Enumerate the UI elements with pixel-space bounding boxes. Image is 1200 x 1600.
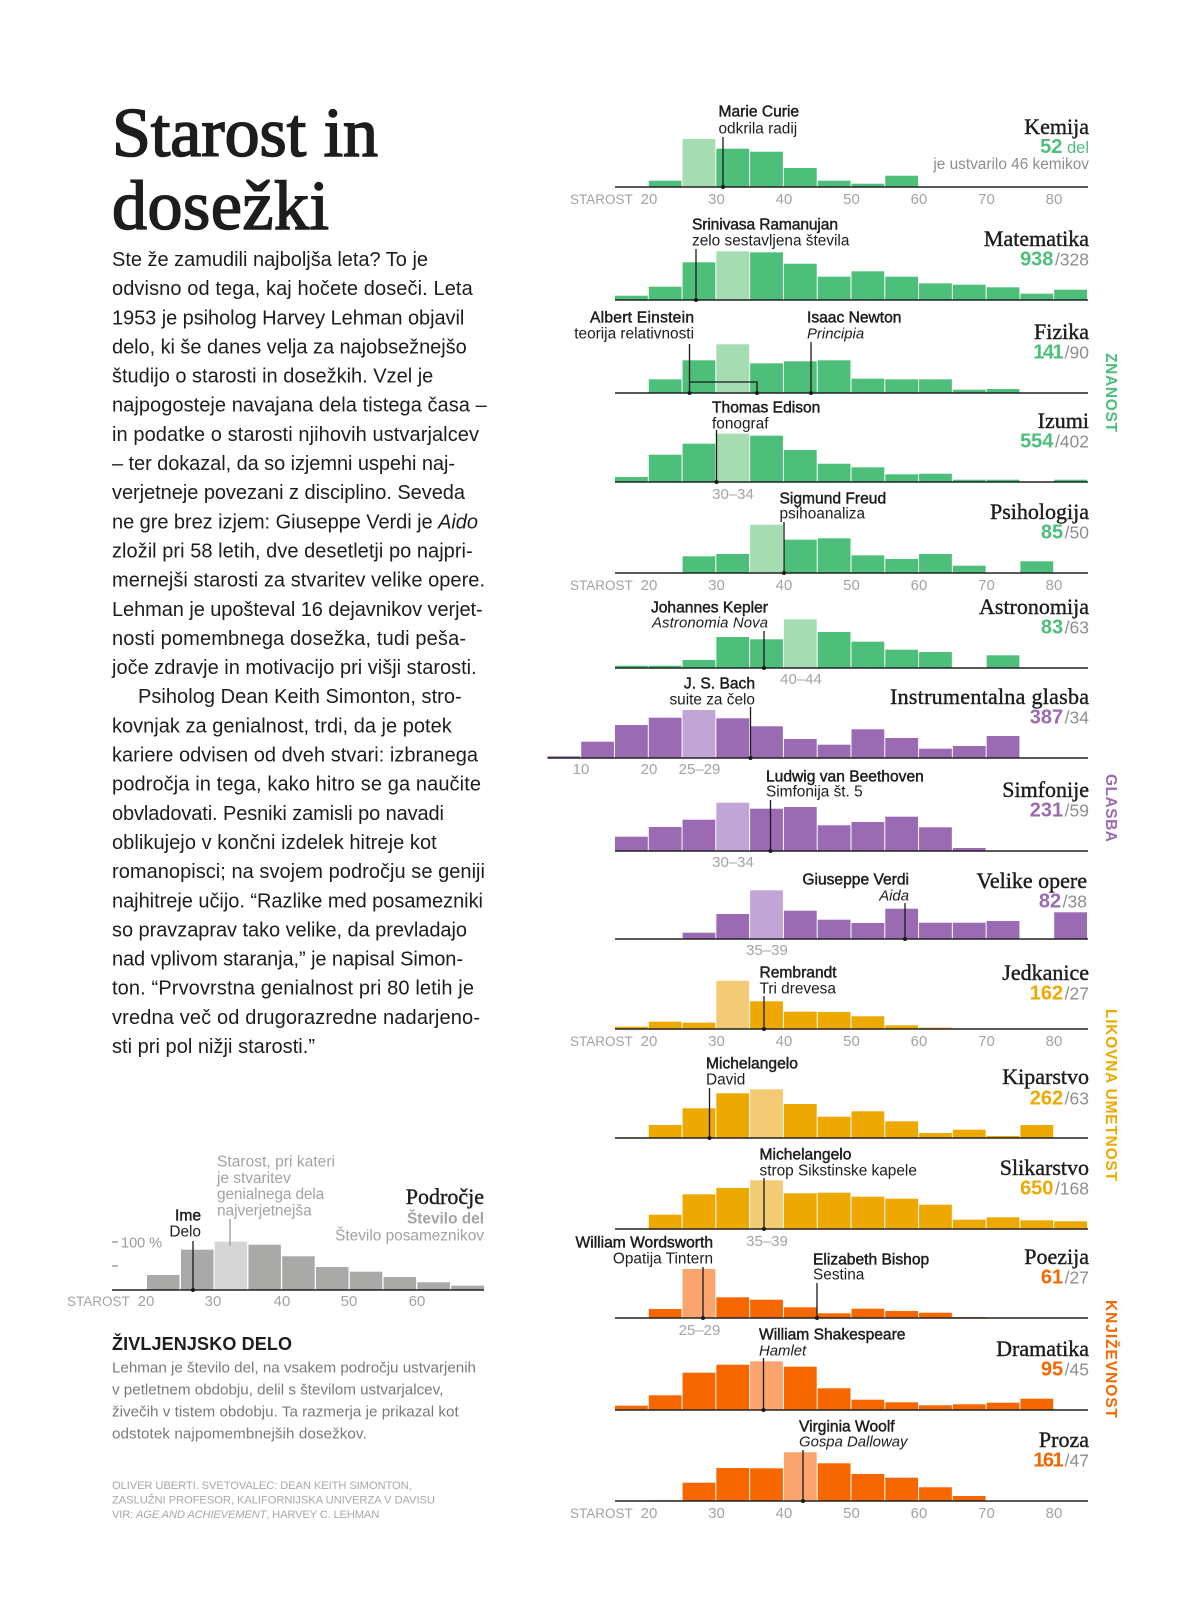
- chart: Poezija: Poezija: [1024, 1244, 1089, 1269]
- chart: Proza: STAROST: [570, 1506, 633, 1521]
- chart: Kiparstvo: [615, 1056, 1089, 1140]
- chart: Instrumentalna glasba: suite za čelo: [669, 692, 755, 708]
- chart: Matematika: Srinivasa Ramanujan: [692, 216, 838, 234]
- chart: Kemija: Marie Curie: [718, 104, 799, 120]
- chart: Instrumentalna glasba: 20: [641, 761, 657, 778]
- chart: Kemija: 52 del: [1040, 136, 1089, 158]
- chart: Proza: 60: [911, 1505, 927, 1522]
- chart: Izumi: Izumi: [1038, 408, 1089, 433]
- chart: Proza: Virginia Woolf: [799, 1418, 895, 1436]
- chart: Simfonije: Simfonije: [1002, 777, 1089, 802]
- chart: Psihologija: 40: [776, 577, 792, 594]
- chart: Psihologija: 80: [1046, 577, 1062, 594]
- body text: 1953 je psiholog Harvey Lehman objavil: [112, 307, 464, 329]
- body text: delo, ki še danes velja za najobsežnejšo: [112, 336, 467, 358]
- chart: Kemija: je ustvarilo 46 kemikov: [932, 156, 1089, 173]
- body text: sti pri pol nižji starosti.”: [112, 1036, 315, 1058]
- chart: Kiparstvo: David: [706, 1072, 745, 1088]
- chart: Jedkanice: 162/27: [1030, 982, 1089, 1004]
- body text: najpogosteje navajana dela tistega časa –: [112, 395, 488, 417]
- note text: odstotek najpomembnejših dosežkov.: [112, 1426, 367, 1442]
- chart: Jedkanice: Tri drevesa: [760, 980, 836, 998]
- body text: Psiholog Dean Keith Simonton, stro-: [138, 686, 462, 708]
- chart: Proza: 50: [843, 1505, 860, 1522]
- legend chart: 40: [274, 1293, 290, 1310]
- chart: Poezija: William Wordsworth: [576, 1234, 713, 1252]
- chart: Matematika: 938/328: [1020, 248, 1089, 270]
- title: [112, 95, 378, 245]
- chart: Astronomija: Astronomia Nova: [651, 616, 768, 632]
- chart: Kiparstvo: Kiparstvo: [1002, 1064, 1089, 1089]
- legend chart: 20: [138, 1293, 154, 1310]
- category label: likovna umetnost: LIKOVNA UMETNOST: [1102, 1009, 1119, 1182]
- chart: Matematika: Matematika: [984, 226, 1089, 251]
- chart: Proza: 161/47: [1033, 1450, 1089, 1472]
- body text: vredna več od drugorazredne nadarjeno-: [112, 1007, 480, 1029]
- legend chart: Ime: [175, 1208, 201, 1224]
- chart: Fizika: Principia: [807, 326, 864, 342]
- body text: mernejši starosti za stvaritev velike opere.: [112, 570, 485, 592]
- chart: Psihologija: psihoanaliza: [780, 506, 866, 522]
- chart: Kiparstvo: 262/63: [1030, 1088, 1089, 1110]
- chart: Dramatika: Dramatika: [996, 1336, 1089, 1361]
- credits: VIR: AGE AND ACHIEVEMENT, HARVEY C. LEHMAN: [112, 1509, 379, 1521]
- chart: Jedkanice: 70: [978, 1033, 995, 1050]
- body text: področja in tega, kako hitro se ga naučite: [112, 774, 481, 796]
- chart: Instrumentalna glasba: 25–29: [679, 761, 720, 778]
- chart: Instrumentalna glasba: J. S. Bach: [684, 676, 755, 692]
- chart: Velike opere: Velike opere: [976, 868, 1087, 893]
- body text: študijo o starosti in dosežkih. Vzel je: [112, 366, 433, 388]
- credits: [112, 1480, 435, 1521]
- chart: Dramatika: 95/45: [1041, 1358, 1089, 1380]
- chart: Slikarstvo: 650/168: [1020, 1178, 1089, 1200]
- legend chart: 50: [341, 1293, 357, 1310]
- chart: Slikarstvo: [615, 1146, 1089, 1250]
- chart: Astronomija: [615, 594, 1089, 688]
- body text: nosti pomembnega dosežka, tudi peša-: [112, 628, 466, 650]
- legend chart: je stvaritev: [216, 1170, 291, 1187]
- chart: Dramatika: [615, 1326, 1089, 1412]
- body text: kovnjak za genialnost, trdi, da je potek: [112, 715, 453, 737]
- chart: Poezija: 61/27: [1041, 1266, 1089, 1288]
- chart: Poezija: Elizabeth Bishop: [813, 1252, 929, 1268]
- legend chart: STAROST: [67, 1294, 130, 1309]
- legend chart: 60: [409, 1293, 425, 1310]
- chart: Proza: 80: [1046, 1505, 1062, 1522]
- chart: Kemija: odkrila radij: [718, 120, 797, 138]
- body text: obvladovati. Pesniki zamisli po navadi: [112, 803, 444, 825]
- chart: Slikarstvo: Michelangelo: [760, 1146, 852, 1164]
- chart: Proza: 40: [776, 1505, 792, 1522]
- chart: Kiparstvo: Michelangelo: [706, 1056, 798, 1072]
- chart: Velike opere: Giuseppe Verdi: [802, 872, 909, 888]
- chart: Kemija: 80: [1046, 191, 1062, 208]
- chart: Astronomija: Astronomija: [979, 594, 1089, 619]
- chart: Jedkanice: 80: [1046, 1033, 1062, 1050]
- body text: Lehman je upošteval 16 dejavnikov verjet-: [112, 599, 483, 621]
- chart: Dramatika: Hamlet: [759, 1344, 807, 1360]
- chart: Psihologija: [570, 490, 1089, 594]
- chart: Jedkanice: 40: [776, 1033, 792, 1050]
- chart: Psihologija: 20: [641, 577, 657, 594]
- category label: glasba: GLASBA: [1102, 774, 1119, 842]
- chart: Proza: 70: [978, 1505, 995, 1522]
- credits: OLIVER UBERTI. SVETOVALEC: DEAN KEITH SIMONTON,: [112, 1480, 412, 1492]
- body text: verjetneje povezani z disciplino. Seveda: [112, 482, 466, 504]
- chart: Kemija: 40: [776, 191, 792, 208]
- legend chart: Število del: [407, 1210, 484, 1228]
- chart: Astronomija: 40–44: [780, 671, 822, 688]
- chart: Izumi: 554/402: [1020, 430, 1089, 452]
- chart: Psihologija: Sigmund Freud: [780, 490, 886, 508]
- body text: ton. “Prvovrstna genialnost pri 80 letih je: [112, 978, 474, 1000]
- chart: Velike opere: [615, 868, 1088, 959]
- chart: Kemija: Kemija: [1024, 114, 1089, 139]
- legend chart: Področje: [406, 1184, 484, 1209]
- chart: Simfonije: Ludwig van Beethoven: [766, 768, 924, 786]
- chart: Fizika: Isaac Newton: [807, 310, 901, 326]
- chart: Instrumentalna glasba: Instrumentalna glasba: [890, 684, 1089, 709]
- chart: Jedkanice: Jedkanice: [1002, 960, 1089, 985]
- chart: Fizika: teorija relativnosti: [574, 326, 694, 342]
- category label: znanost: ZNANOST: [1102, 353, 1119, 433]
- chart: Slikarstvo: Slikarstvo: [1000, 1155, 1089, 1180]
- body text: zložil pri 58 letih, dve desetletji po najpri-: [112, 540, 473, 562]
- note text: živečih v tistem obdobju. Ta razmerja je prikazal kot: [112, 1404, 459, 1420]
- chart: Proza: Gospa Dalloway: [799, 1434, 909, 1450]
- legend chart: Število posameznikov: [335, 1228, 484, 1244]
- body text: kariere odvisen od dveh stvari: izbranega: [112, 744, 479, 766]
- chart: Velike opere: Aida: [878, 888, 909, 904]
- chart: Proza: [570, 1418, 1089, 1522]
- chart: Instrumentalna glasba: 10: [573, 761, 589, 778]
- note text: Lehman je število del, na vsakem področju ustvarjenih: [112, 1360, 476, 1376]
- title: dosežki: [112, 168, 329, 245]
- chart: Kemija: STAROST: [570, 192, 633, 207]
- body text: in podatke o starosti njihovih ustvarjalcev: [112, 424, 479, 446]
- chart: Proza: 20: [641, 1505, 657, 1522]
- chart: Matematika: [615, 216, 1089, 302]
- credits: ZASLUŽNI PROFESOR, KALIFORNIJSKA UNIVERZA V DAVISU: [112, 1494, 435, 1506]
- body text: nad vplivom staranja,” je napisal Simon-: [112, 949, 463, 971]
- chart: Psihologija: 30: [708, 577, 725, 594]
- chart: Jedkanice: 60: [911, 1033, 927, 1050]
- chart: Velike opere: 82/38: [1039, 890, 1087, 912]
- chart: Slikarstvo: strop Sikstinske kapele: [760, 1162, 917, 1180]
- chart: Instrumentalna glasba: 387/34: [1030, 706, 1089, 728]
- chart: Simfonije: 30–34: [712, 854, 754, 871]
- chart: Jedkanice: 50: [843, 1033, 860, 1050]
- chart: Jedkanice: STAROST: [570, 1034, 633, 1049]
- body text: najhitreje učijo. “Razlike med posamezniki: [112, 890, 483, 912]
- chart: Poezija: Sestina: [813, 1266, 865, 1284]
- body text: ne gre brez izjem: Giuseppe Verdi je Aido: [112, 511, 478, 533]
- legend chart: 100 %: [121, 1236, 162, 1252]
- chart: Fizika: 141/90: [1033, 342, 1089, 364]
- chart: Kemija: 20: [641, 191, 657, 208]
- chart: Instrumentalna glasba: [547, 676, 1089, 778]
- body text: oblikujejo v končni izdelek hitreje kot: [112, 832, 437, 854]
- chart: Psihologija: 60: [911, 577, 927, 594]
- body text: [111, 249, 488, 1058]
- chart: Kemija: 30: [708, 191, 725, 208]
- chart: Fizika: Albert Einstein: [590, 310, 694, 326]
- chart: Simfonije: 231/59: [1030, 800, 1089, 822]
- body text: odvisno od tega, kaj hočete doseči. Leta: [112, 278, 474, 300]
- chart: Matematika: zelo sestavljena števila: [692, 232, 850, 250]
- chart: Slikarstvo: 35–39: [746, 1233, 788, 1250]
- chart: Izumi: 30–34: [712, 486, 754, 503]
- legend chart: najverjetnejša: [217, 1202, 312, 1220]
- chart: Izumi: Thomas Edison: [712, 400, 820, 416]
- title: Starost in: [112, 95, 378, 172]
- note text: [112, 1360, 476, 1442]
- chart: Astronomija: Johannes Kepler: [651, 600, 768, 616]
- chart: Psihologija: 85/50: [1041, 522, 1089, 544]
- chart: Psihologija: 50: [843, 577, 860, 594]
- chart: Psihologija: 70: [978, 577, 995, 594]
- chart: Izumi: fonograf: [712, 416, 769, 432]
- chart: Kemija: 70: [978, 191, 995, 208]
- chart: Psihologija: STAROST: [570, 578, 633, 593]
- chart: Velike opere: 35–39: [746, 942, 788, 959]
- chart: Kemija: [570, 104, 1089, 208]
- chart: Izumi: [615, 400, 1089, 503]
- chart: Fizika: Fizika: [1034, 319, 1089, 344]
- legend chart: Delo: [169, 1224, 201, 1240]
- chart: Jedkanice: [570, 960, 1089, 1050]
- chart: Kemija: 50: [843, 191, 860, 208]
- chart: Proza: Proza: [1039, 1427, 1089, 1452]
- body text: so pravzaprav tako velike, da prevladajo: [112, 919, 467, 941]
- chart: Jedkanice: 20: [641, 1033, 657, 1050]
- chart: Poezija: 25–29: [679, 1322, 720, 1339]
- chart: Jedkanice: Rembrandt: [760, 964, 837, 982]
- note text: v petletnem obdobju, delil s številom ustvarjalcev,: [112, 1382, 443, 1398]
- chart: Simfonije: [615, 768, 1089, 871]
- chart: Dramatika: William Shakespeare: [759, 1326, 905, 1344]
- body text: – ter dokazal, da so izjemni uspehi naj-: [112, 453, 455, 475]
- legend chart: genialnega dela: [217, 1186, 325, 1203]
- category label: književnost: KNJIŽEVNOST: [1102, 1300, 1120, 1419]
- body text: Ste že zamudili najboljša leta? To je: [112, 249, 428, 271]
- chart: Poezija: Opatija Tintern: [613, 1250, 713, 1268]
- legend chart: [67, 1154, 484, 1310]
- chart: Jedkanice: 30: [708, 1033, 725, 1050]
- legend chart: 30: [205, 1293, 221, 1310]
- body text: joče zdravje in motivacijo pri višji starosti.: [111, 657, 477, 679]
- body text: romanopisci; na svojem področju se geniji: [112, 861, 485, 883]
- chart: Poezija: [576, 1234, 1089, 1339]
- chart: Kemija: 60: [911, 191, 927, 208]
- chart: Simfonije: Simfonija št. 5: [766, 784, 863, 800]
- chart: Fizika: [574, 310, 1089, 395]
- chart: Proza: 30: [708, 1505, 725, 1522]
- chart: Astronomija: 83/63: [1041, 616, 1089, 638]
- legend chart: Starost, pri kateri: [217, 1154, 335, 1170]
- chart: Psihologija: Psihologija: [990, 499, 1089, 524]
- heading: življenjsko delo: ŽIVLJENJSKO DELO: [112, 1333, 292, 1354]
